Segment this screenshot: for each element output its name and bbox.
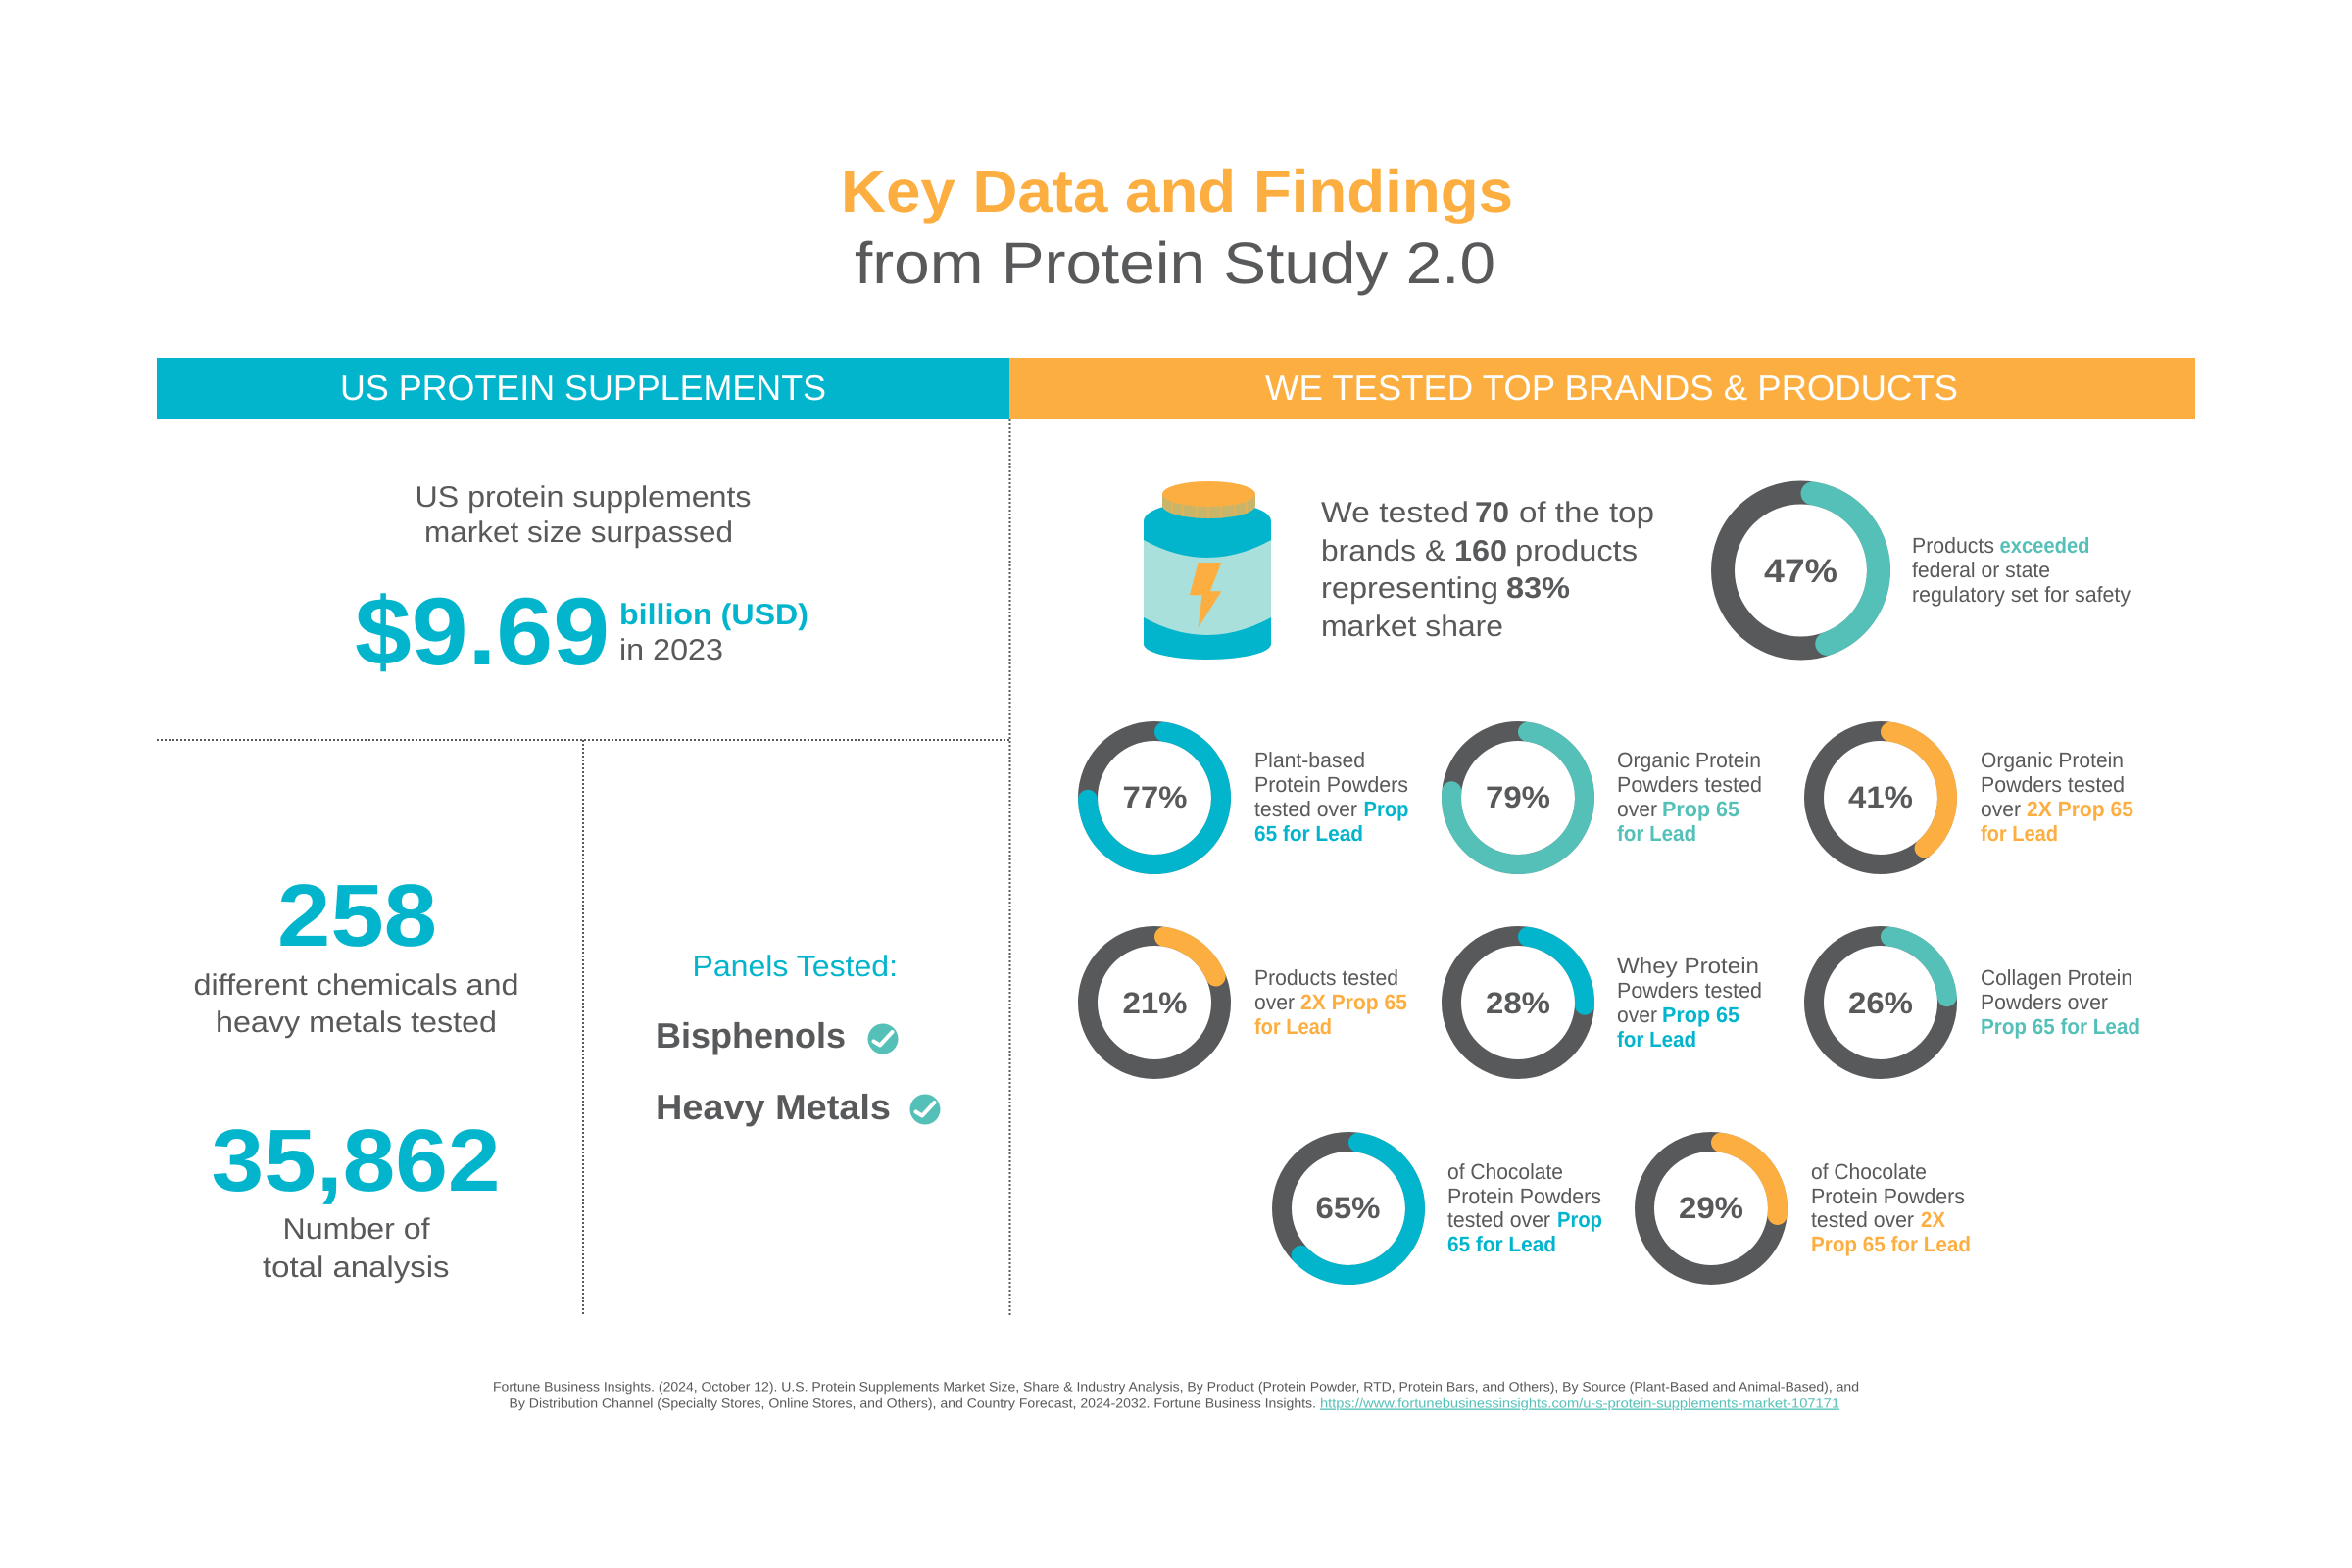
label: 41% organic 2X (1981, 748, 2133, 846)
label: 65% chocolate (1447, 1159, 1602, 1256)
text: tested brands and products: 70 (1475, 497, 1509, 529)
header: we tested top brands and products (1009, 358, 2195, 419)
donut: 41% organic 2X (1805, 722, 1956, 873)
label: 21% products 2X: for Lead (1254, 1014, 1332, 1039)
donut: 65% chocolate (1273, 1133, 1424, 1284)
text: tested brands and products: market share (1321, 611, 1503, 643)
donut: 29% chocolate 2X (1636, 1133, 1787, 1284)
label: 29% chocolate 2X: tested over (1811, 1207, 1914, 1232)
donut: 21% products 2X (1079, 927, 1230, 1078)
donut: 79% organic (1443, 722, 1593, 873)
label: 77% plant-based: Protein Powders (1254, 772, 1408, 797)
icon: check heavy metals (909, 1094, 941, 1125)
label: 79% organic: Prop 65 (1662, 797, 1740, 821)
header: US protein supplements (157, 358, 1009, 419)
label: 79% organic: over (1617, 797, 1657, 821)
title: Key Data and Findings (841, 158, 1513, 224)
label: 79% organic: for Lead (1617, 821, 1696, 846)
label: 41% organic 2X: Powders tested (1981, 772, 2125, 797)
item: heavy metals: Heavy Metals (656, 1087, 891, 1127)
label: 29% chocolate 2X: Protein Powders (1811, 1184, 1965, 1208)
label: 65% chocolate: tested over (1447, 1207, 1550, 1232)
market size unit (619, 599, 808, 666)
label: 47% exceeded (1912, 533, 2131, 607)
label: 65% chocolate: of Chocolate (1447, 1159, 1563, 1184)
text: tested brands and products: 83% (1506, 572, 1570, 605)
market size unit: billion (USD) (619, 599, 808, 631)
header: US protein supplements: US PROTEIN SUPPLEMENTS (340, 368, 826, 408)
label: 29% chocolate 2X: Prop 65 for Lead (1811, 1232, 1971, 1256)
label: 26% collagen: Powders over (1981, 990, 2108, 1014)
label: 21% products 2X (1254, 965, 1407, 1039)
source citation: https://www.fortunebusinessinsights.com/u-s-protein-supplements-market-107171 (1320, 1396, 1839, 1411)
label: 29% chocolate 2X: 2X (1921, 1207, 1945, 1232)
label: 79% organic: Organic Protein (1617, 748, 1761, 772)
label: 65% chocolate: 65 for Lead (1447, 1232, 1556, 1256)
label: 28% whey (1617, 954, 1762, 1052)
stat: 258 chemicals (194, 867, 519, 1039)
donut: 41% organic 2X: 41% (1848, 780, 1913, 814)
label: 28% whey: Powders tested (1617, 978, 1762, 1003)
label: 28% whey: Prop 65 (1662, 1003, 1740, 1027)
stat: 35,862 analyses: Number of (282, 1213, 430, 1246)
label: 47% exceeded: exceeded (1999, 533, 2089, 558)
label: 21% products 2X: 2X Prop 65 (1300, 990, 1407, 1014)
item: bisphenols: Bisphenols (656, 1015, 846, 1055)
donut: 65% chocolate: 65% (1315, 1191, 1380, 1225)
stat: 35,862 analyses: 35,862 (212, 1112, 500, 1210)
label: 28% whey: over (1617, 1003, 1657, 1027)
label: 41% organic 2X: for Lead (1981, 821, 2058, 846)
stat: 258 chemicals: 258 (277, 867, 437, 965)
source citation: Fortune Business Insights. (2024, October 12). U.S. Protein Supplements Market Size, Share & Industry Analysis, By Product (Protein Powder, RTD, Protein Bars, and Others), By Source (Plant-Based and Animal-Based), and (493, 1380, 1859, 1394)
label: 47% exceeded: Products (1912, 533, 1994, 558)
market size intro text: market size surpassed (424, 516, 733, 549)
text: tested brands and products: brands & (1321, 535, 1446, 567)
label: 79% organic: Powders tested (1617, 772, 1762, 797)
label: 41% organic 2X: 2X Prop 65 (2027, 797, 2133, 821)
title (841, 158, 1513, 296)
donut: 26% collagen (1805, 927, 1956, 1078)
label: 77% plant-based (1254, 748, 1409, 846)
text: tested brands and products: We tested (1321, 497, 1469, 529)
stat: 258 chemicals: different chemicals and (194, 969, 519, 1002)
label: 28% whey: Whey Protein (1617, 954, 1759, 978)
source citation (493, 1380, 1859, 1411)
title: from Protein Study 2.0 (855, 230, 1495, 296)
donut: 21% products 2X: 21% (1123, 986, 1188, 1020)
label: 26% collagen (1981, 965, 2140, 1039)
label: 65% chocolate: Prop (1557, 1207, 1602, 1232)
market size value: $9.69 (355, 577, 610, 685)
market size intro text: US protein supplements (416, 481, 751, 514)
donut: 79% organic: 79% (1486, 780, 1550, 814)
stat: 258 chemicals: heavy metals tested (216, 1006, 497, 1039)
label: 28% whey: for Lead (1617, 1027, 1696, 1052)
label: 77% plant-based: tested over (1254, 797, 1357, 821)
donut: 47% exceeded (1712, 481, 1889, 660)
donut: 47% exceeded: 47% (1764, 553, 1838, 590)
stat: 35,862 analyses: total analysis (263, 1251, 449, 1284)
label: 21% products 2X: over (1254, 990, 1295, 1014)
market size intro text (416, 481, 751, 549)
panel: panels tested (656, 951, 941, 1127)
text: tested brands and products: products (1515, 535, 1638, 567)
text: tested brands and products: of the top (1519, 497, 1654, 529)
icon: protein jar (1144, 481, 1271, 660)
stat: 35,862 analyses (212, 1112, 500, 1284)
donut: 77% plant-based (1079, 722, 1230, 873)
label: 77% plant-based: 65 for Lead (1254, 821, 1363, 846)
label: 41% organic 2X: Organic Protein (1981, 748, 2124, 772)
donut: 77% plant-based: 77% (1123, 780, 1188, 814)
icon: check bisphenols (868, 1023, 898, 1054)
text: tested brands and products: representing (1321, 572, 1498, 605)
label: 77% plant-based: Prop (1364, 797, 1409, 821)
panel: market size (355, 481, 808, 685)
text: tested brands and products (1321, 497, 1654, 643)
label: 29% chocolate 2X: of Chocolate (1811, 1159, 1927, 1184)
header: we tested top brands and products: WE TESTED TOP BRANDS & PRODUCTS (1265, 368, 1958, 408)
donut: 28% whey (1443, 927, 1593, 1078)
donut: 26% collagen: 26% (1848, 986, 1913, 1020)
label: 65% chocolate: Protein Powders (1447, 1184, 1601, 1208)
label: 21% products 2X: Products tested (1254, 965, 1398, 990)
donut: 28% whey: 28% (1486, 986, 1550, 1020)
market size unit: in 2023 (619, 634, 723, 666)
panels tested heading: Panels Tested: (692, 951, 898, 983)
label: 26% collagen: Collagen Protein (1981, 965, 2132, 990)
donut: 29% chocolate 2X: 29% (1679, 1191, 1743, 1225)
source citation: By Distribution Channel (Specialty Stores, Online Stores, and Others), and Country Forecast, 2024-2032. Fortune Business Insights. (510, 1396, 1316, 1411)
label: 29% chocolate 2X (1811, 1159, 1971, 1256)
text: tested brands and products: 160 (1454, 535, 1507, 567)
label: 47% exceeded: regulatory set for safety (1912, 582, 2131, 607)
panel: chemical counts (194, 867, 519, 1284)
label: 47% exceeded: federal or state (1912, 558, 2050, 582)
label: 79% organic (1617, 748, 1762, 846)
label: 77% plant-based: Plant-based (1254, 748, 1365, 772)
label: 41% organic 2X: over (1981, 797, 2021, 821)
label: 26% collagen: Prop 65 for Lead (1981, 1014, 2140, 1039)
